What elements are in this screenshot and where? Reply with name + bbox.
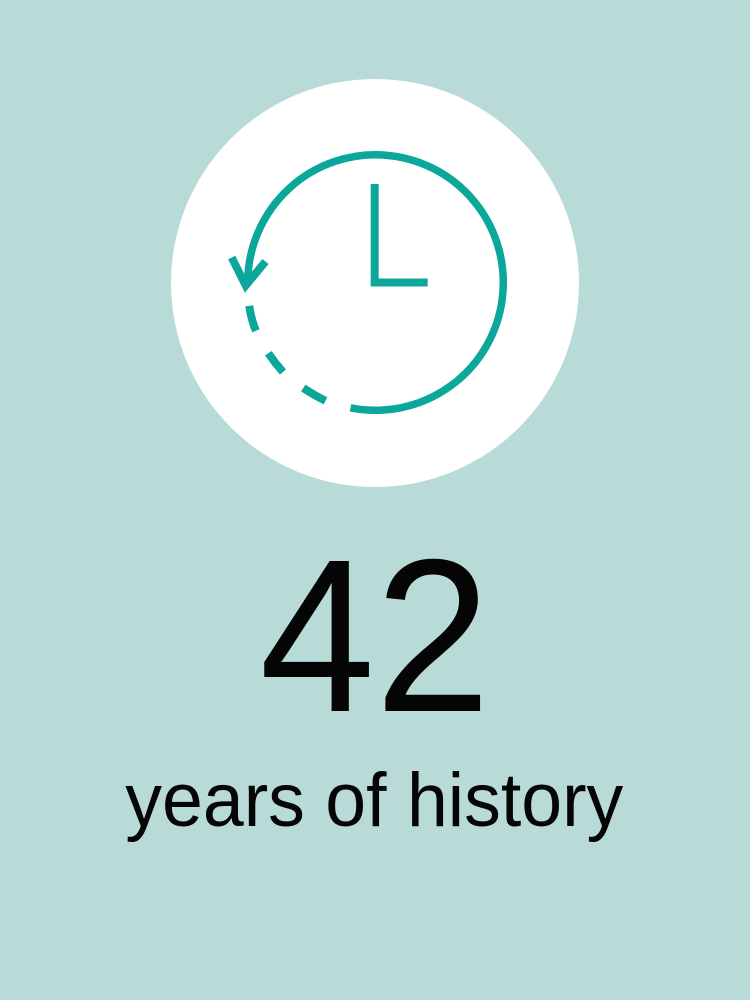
icon: clock with counter-clockwise arrow <box>232 155 503 410</box>
clock hands <box>375 184 428 282</box>
caption: years of history: years of history <box>125 758 623 843</box>
clock dashed arc <box>249 306 326 401</box>
number: 42: 42 <box>260 515 490 758</box>
clock solid arc <box>248 155 503 410</box>
white circle badge <box>171 79 579 487</box>
arrow head <box>232 258 266 286</box>
